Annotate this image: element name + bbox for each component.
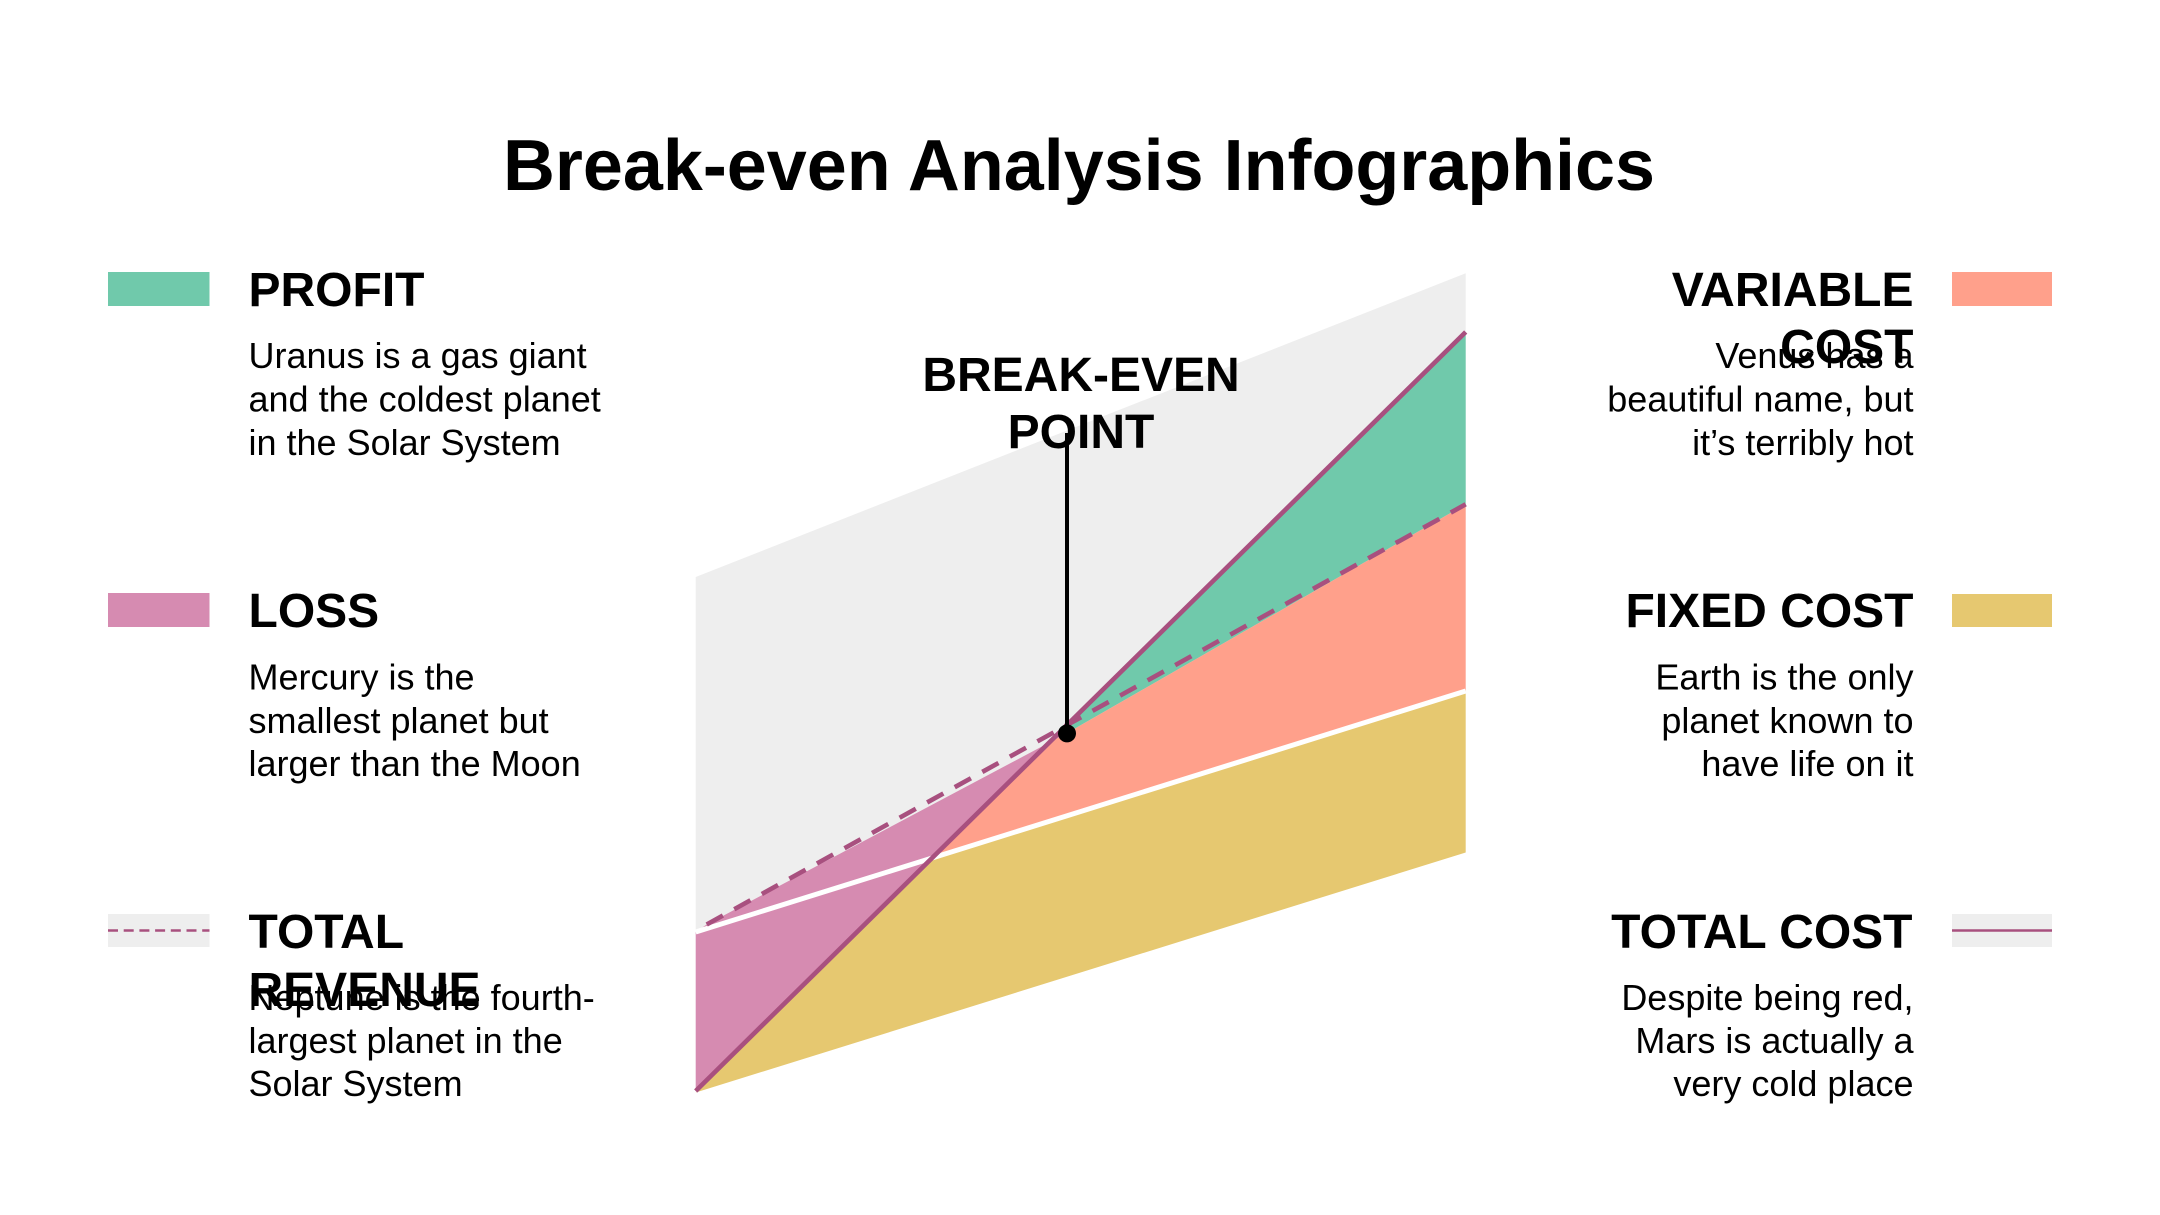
heading: variable cost: VARIABLE bbox=[1672, 264, 1914, 317]
text: total revenue: Solar System bbox=[248, 1063, 463, 1104]
legend: total cost bbox=[1611, 906, 2052, 1104]
break-even pointer bbox=[1065, 433, 1069, 733]
text: total revenue: largest planet in the bbox=[248, 1020, 563, 1061]
text: loss: Mercury is the bbox=[248, 656, 475, 698]
break-even label bbox=[922, 349, 1240, 459]
break-even label: POINT bbox=[1008, 406, 1154, 459]
text: variable cost: it’s terribly hot bbox=[1692, 422, 1914, 463]
legend: variable cost bbox=[1607, 264, 2052, 463]
legend: profit bbox=[108, 264, 601, 463]
swatch: loss bbox=[108, 593, 210, 627]
text: total cost: Mars is actually a bbox=[1635, 1020, 1914, 1061]
area: loss bbox=[696, 733, 1066, 1091]
break-even chart bbox=[696, 273, 1466, 1092]
text: profit: in the Solar System bbox=[248, 422, 561, 463]
swatch: total revenue bbox=[108, 914, 210, 947]
text: loss: smallest planet but bbox=[248, 700, 549, 741]
line: fixed cost boundary bbox=[696, 691, 1466, 932]
text: total revenue: Neptune is the fourth- bbox=[248, 977, 595, 1018]
swatch: profit bbox=[108, 272, 210, 306]
title: Break-even Analysis Infographics bbox=[503, 126, 1655, 206]
text: fixed cost: Earth is the only bbox=[1655, 656, 1914, 698]
heading: variable cost: COST bbox=[1780, 321, 1914, 374]
legend: loss bbox=[108, 585, 581, 784]
heading: total cost: TOTAL COST bbox=[1611, 906, 1912, 959]
area: chart background bbox=[696, 273, 1466, 932]
text: fixed cost: have life on it bbox=[1701, 743, 1914, 784]
area: variable cost bbox=[932, 504, 1466, 858]
legend: fixed cost bbox=[1625, 585, 2052, 784]
legend: total revenue bbox=[108, 906, 595, 1104]
heading: loss: LOSS bbox=[248, 585, 379, 638]
text: profit: and the coldest planet bbox=[248, 378, 601, 420]
heading: profit: PROFIT bbox=[248, 264, 424, 317]
text: variable cost: beautiful name, but bbox=[1607, 378, 1914, 420]
text: loss: larger than the Moon bbox=[248, 743, 581, 784]
heading: total revenue: REVENUE bbox=[248, 964, 481, 1017]
text: total cost: very cold place bbox=[1673, 1063, 1914, 1104]
line: total revenue bbox=[707, 504, 1466, 924]
area: profit bbox=[1062, 332, 1466, 733]
heading: fixed cost: FIXED COST bbox=[1625, 585, 1914, 638]
swatch: variable cost bbox=[1952, 272, 2052, 306]
heading: total revenue: TOTAL bbox=[248, 906, 404, 959]
text: fixed cost: planet known to bbox=[1661, 700, 1914, 741]
swatch: total cost bbox=[1952, 914, 2052, 947]
break-even dot bbox=[1058, 724, 1076, 742]
area: fixed cost bbox=[696, 691, 1466, 1092]
swatch: fixed cost bbox=[1952, 594, 2052, 627]
line: total cost bbox=[696, 332, 1466, 1091]
text: variable cost: Venus has a bbox=[1715, 335, 1914, 376]
break-even label: BREAK-EVEN bbox=[922, 349, 1240, 402]
text: profit: Uranus is a gas giant bbox=[248, 335, 587, 376]
text: total cost: Despite being red, bbox=[1621, 977, 1914, 1018]
